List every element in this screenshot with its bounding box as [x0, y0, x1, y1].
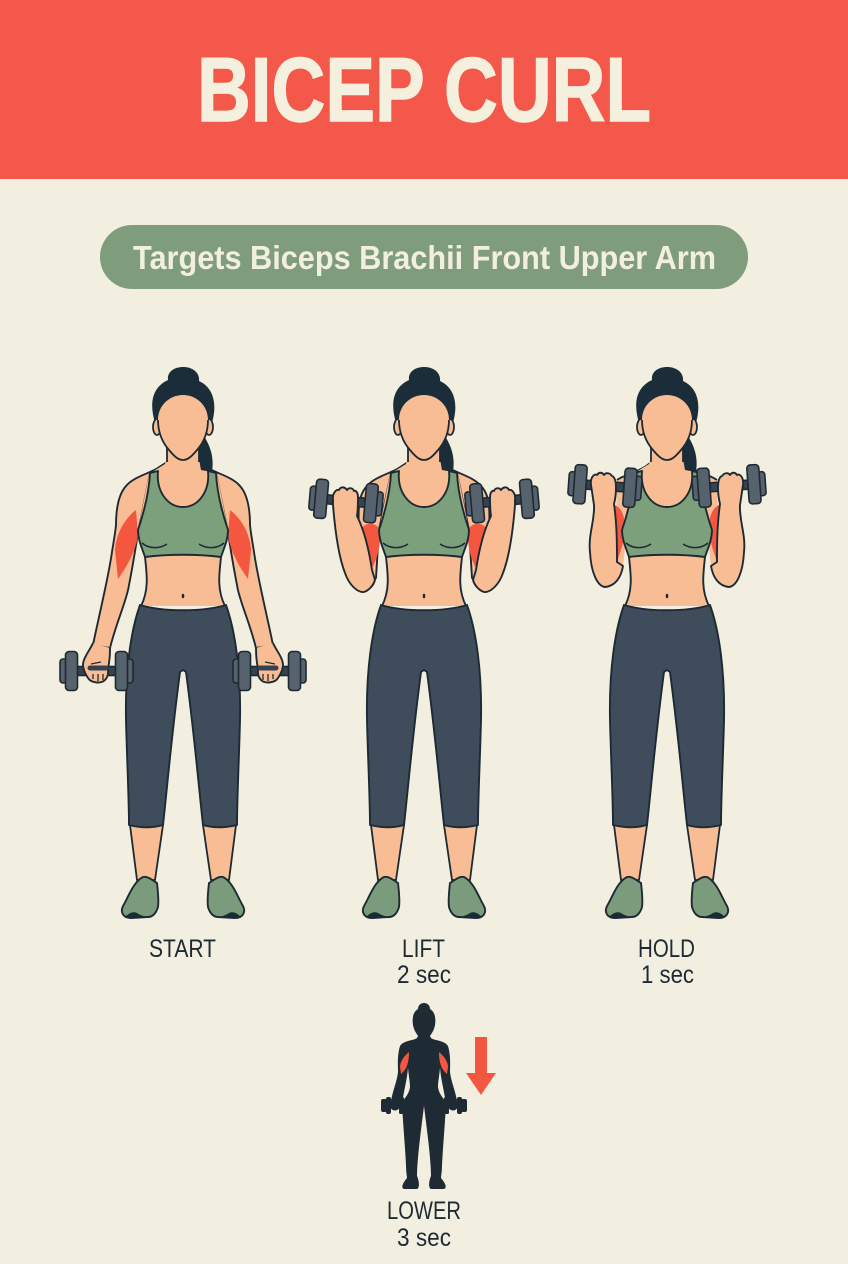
figure: start position: [60, 367, 306, 918]
title: BICEP CURL: [197, 40, 651, 141]
icon: down arrow: [466, 1037, 496, 1095]
label: lower 3 sec: [387, 1197, 461, 1252]
figure: lower silhouette: [381, 1003, 467, 1189]
label: lift 2 sec: 2 sec: [397, 961, 451, 989]
label: lower 3 sec: 3 sec: [397, 1224, 451, 1252]
label: start: START: [149, 935, 216, 963]
label: lift 2 sec: LIFT: [402, 935, 445, 963]
figure: hold position: [567, 367, 767, 918]
label: lift 2 sec: [397, 935, 451, 989]
label: hold 1 sec: [638, 935, 695, 989]
header banner: [0, 0, 848, 179]
label: hold 1 sec: 1 sec: [641, 961, 694, 989]
figure: lift position: [308, 367, 540, 918]
target muscle pill: Targets Biceps Brachii Front Upper Arm: [133, 239, 716, 276]
label: hold 1 sec: HOLD: [638, 935, 695, 963]
target muscle pill: [100, 225, 748, 289]
label: lower 3 sec: LOWER: [387, 1197, 461, 1225]
